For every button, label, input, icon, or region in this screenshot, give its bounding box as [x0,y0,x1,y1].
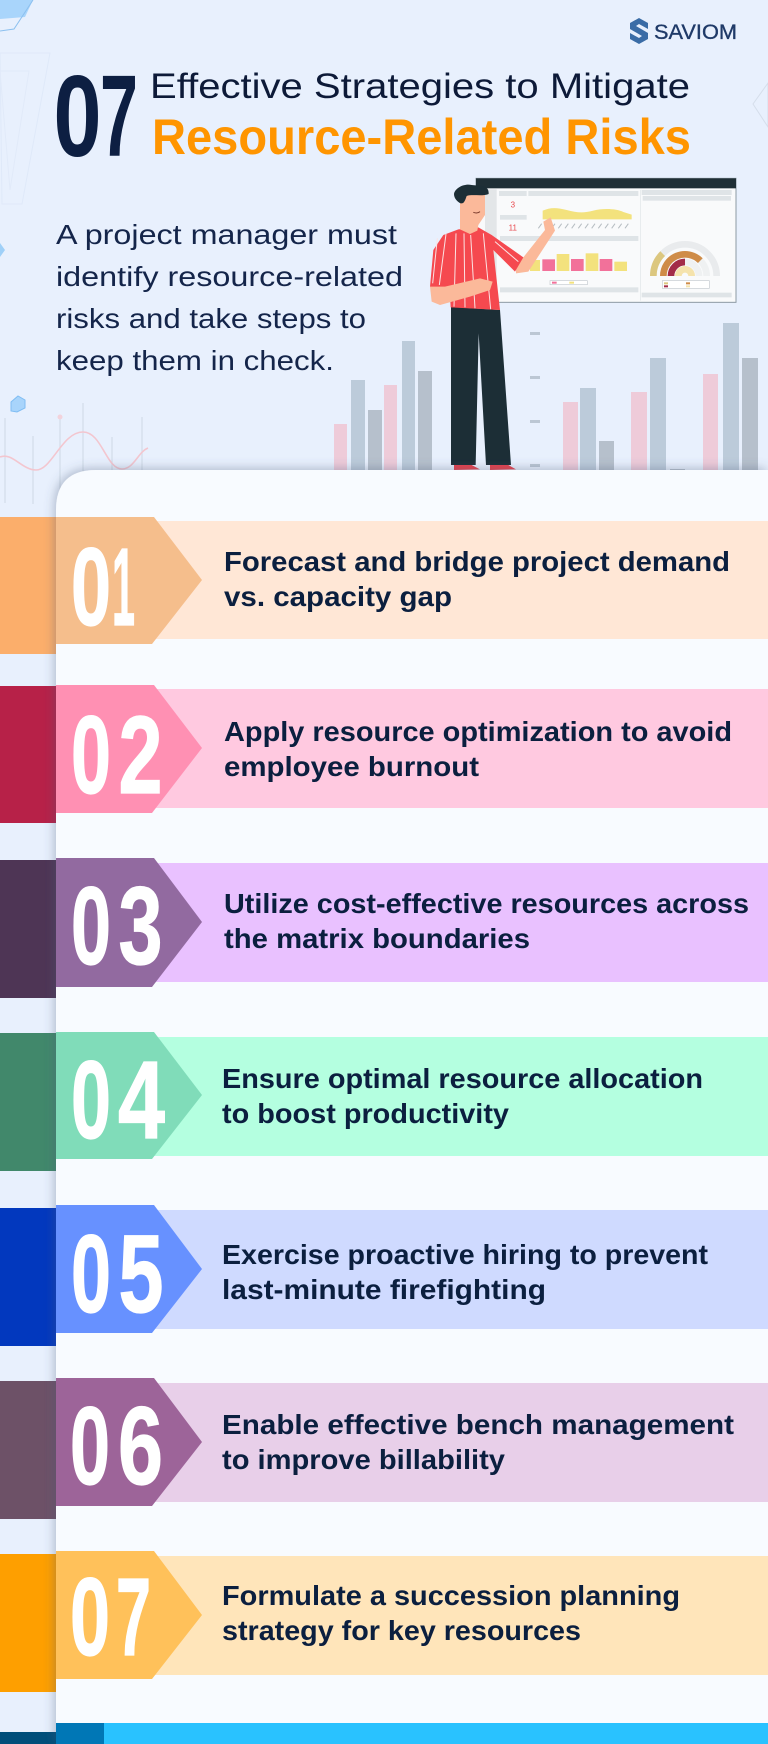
item 06: to improve billability [222,1444,506,1475]
logo: Saviom: SAVIOM [654,21,737,44]
item 05: last-minute firefighting [222,1274,546,1305]
item 02: employee burnout [224,751,479,782]
item 07: 0 [70,1556,110,1679]
item 05 [56,1205,768,1336]
item 07: 7 [116,1556,151,1679]
item 03 [56,858,768,988]
item 07: Formulate a succession planning [222,1580,680,1611]
item 01: Forecast and bridge project demand [224,546,730,577]
item 07: strategy for key resources [222,1615,581,1646]
item 06 [56,1378,768,1508]
main panel [56,470,768,1744]
item 04: 0 [71,1039,111,1162]
item 01: 1 [112,526,135,649]
item 02: Apply resource optimization to avoid [224,716,732,747]
item 02 [56,685,768,817]
item 01: 0 [71,526,111,649]
item 01 [56,517,768,649]
item 04: to boost productivity [222,1098,510,1129]
item 04: Ensure optimal resource allocation [222,1063,703,1094]
lower arm [430,278,493,305]
item 06: Enable effective bench management [222,1409,734,1440]
shirt [430,227,523,310]
item 05: Exercise proactive hiring to prevent [222,1239,708,1270]
item 01: vs. capacity gap [224,581,452,612]
head [460,193,485,234]
intro text: A project manager must [56,219,397,250]
item 06: 0 [70,1385,110,1508]
trousers [451,307,511,465]
item 04 [56,1032,768,1162]
item 03: Utilize cost-effective resources across [224,888,749,919]
item 04: 4 [118,1039,165,1162]
dashboard screen [476,178,736,302]
item 05: 5 [118,1213,164,1336]
radial chart [653,244,717,288]
area chart [543,208,632,219]
item 02: 0 [71,694,111,817]
title: Effective Strategies to Mitigate [150,67,690,106]
footer bar [56,1723,768,1744]
item 06: 6 [118,1385,163,1508]
decoration: top-left shapes [0,0,768,257]
hair [454,185,489,203]
title [54,51,691,181]
illustration: presenter and dashboard [430,178,736,470]
item 07 [56,1551,768,1679]
intro text: risks and take steps to [56,303,366,334]
left colour tabs [0,517,60,1744]
background bar chart [334,323,758,472]
shoes [454,465,480,470]
intro text: identify resource-related [56,261,403,292]
item 02: 2 [118,694,162,817]
intro text [56,219,403,376]
presenter [430,185,555,470]
title: 7 [100,51,138,181]
column chart [530,253,627,285]
intro text: keep them in check. [56,345,334,376]
pointing arm [516,217,555,273]
dashboard screen: 3 [511,200,516,209]
item 03: 3 [118,865,162,988]
dashboard screen: 11 [509,224,518,233]
title: 0 [54,51,102,181]
decoration: line chart bottom-left [0,396,148,504]
title: Resource-Related Risks [152,109,691,165]
logo: Saviom [630,18,737,44]
item 03: the matrix boundaries [224,923,530,954]
item 03: 0 [71,865,111,988]
item 05: 0 [71,1213,111,1336]
